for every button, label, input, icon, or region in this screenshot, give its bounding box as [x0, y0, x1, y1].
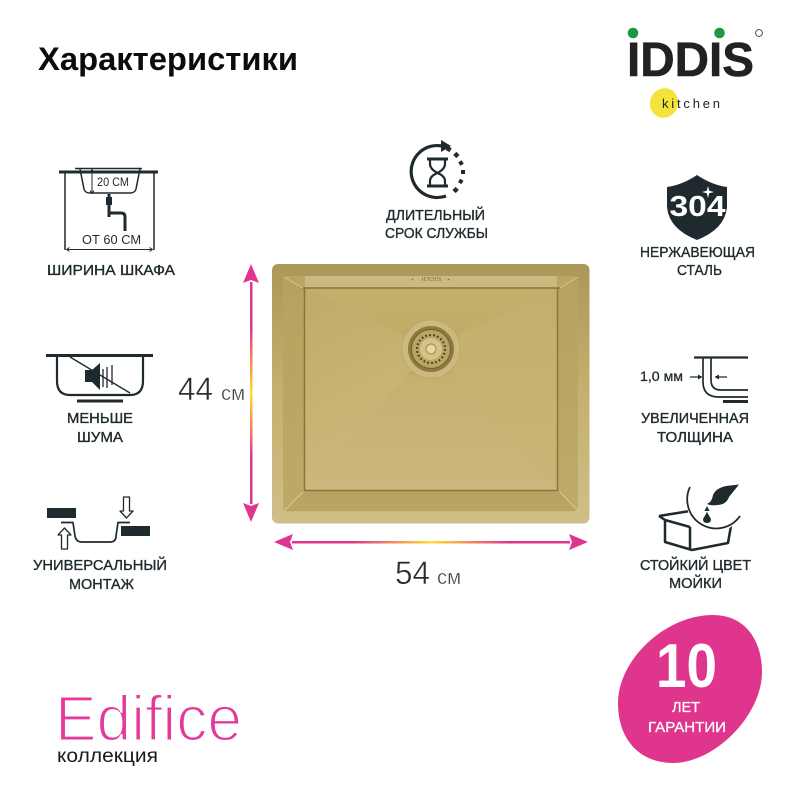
logo: IDDIS kitchen	[627, 28, 762, 123]
icon and label: cabinet width: ОТ 60 СМ	[82, 232, 141, 247]
collection name: коллекция	[57, 746, 158, 767]
label: 54 cm	[395, 555, 461, 591]
label: 44 cm: 44	[178, 371, 213, 407]
label: 44 cm	[178, 371, 245, 407]
icon and label: durable colour: СТОЙКИЙ ЦВЕТ	[640, 556, 751, 574]
badge: 10 year warranty: ГАРАНТИИ	[648, 719, 726, 736]
badge: 10 year warranty: ЛЕТ	[672, 699, 700, 716]
icon and label: long service life	[385, 140, 488, 242]
icon and label: increased thickness: 1,0 мм	[640, 368, 683, 384]
icon and label: less noise: ШУМА	[77, 430, 123, 446]
icon and label: less noise	[46, 355, 153, 446]
icon and label: increased thickness	[640, 357, 749, 446]
title: Характеристики	[38, 41, 298, 77]
icon and label: long service life: СРОК СЛУЖБЫ	[385, 226, 488, 242]
icon and label: 304 stainless steel: СТАЛЬ	[677, 263, 722, 279]
arrow: height dimension	[243, 264, 259, 522]
icon and label: cabinet width	[47, 168, 175, 279]
icon and label: cabinet width: ШИРИНА ШКАФА	[47, 263, 175, 279]
icon and label: 304 stainless steel: 304	[670, 191, 726, 223]
icon and label: 304 stainless steel: НЕРЖАВЕЮЩАЯ	[640, 245, 755, 261]
badge: 10 year warranty	[618, 615, 762, 763]
icon and label: universal mounting: МОНТАЖ	[69, 577, 135, 593]
icon and label: universal mounting	[33, 497, 167, 593]
icon and label: less noise: МЕНЬШЕ	[67, 411, 133, 427]
logo: IDDIS kitchen: kitchen	[662, 96, 720, 111]
sink maker mark: IDDIS	[422, 277, 442, 283]
icon and label: long service life: ДЛИТЕЛЬНЫЙ	[386, 206, 485, 224]
icon and label: increased thickness: УВЕЛИЧЕННАЯ	[641, 411, 749, 427]
arrow: width dimension	[274, 534, 588, 550]
icon and label: 304 stainless steel	[640, 175, 755, 279]
icon and label: increased thickness: ТОЛЩИНА	[657, 430, 733, 446]
sink photo	[272, 264, 590, 524]
icon and label: cabinet width: 20 СМ	[97, 177, 129, 189]
logo: IDDIS kitchen: IDDIS	[627, 34, 754, 87]
icon and label: durable colour: МОЙКИ	[669, 574, 722, 592]
icon and label: universal mounting: УНИВЕРСАЛЬНЫЙ	[33, 556, 167, 574]
collection name: Edifice	[55, 682, 242, 754]
label: 54 cm: см	[437, 567, 461, 589]
badge: 10 year warranty: 10	[656, 632, 717, 701]
label: 44 cm: см	[221, 383, 245, 405]
icon and label: durable colour	[640, 476, 751, 592]
label: 54 cm: 54	[395, 555, 430, 591]
drain strainer	[402, 320, 460, 378]
